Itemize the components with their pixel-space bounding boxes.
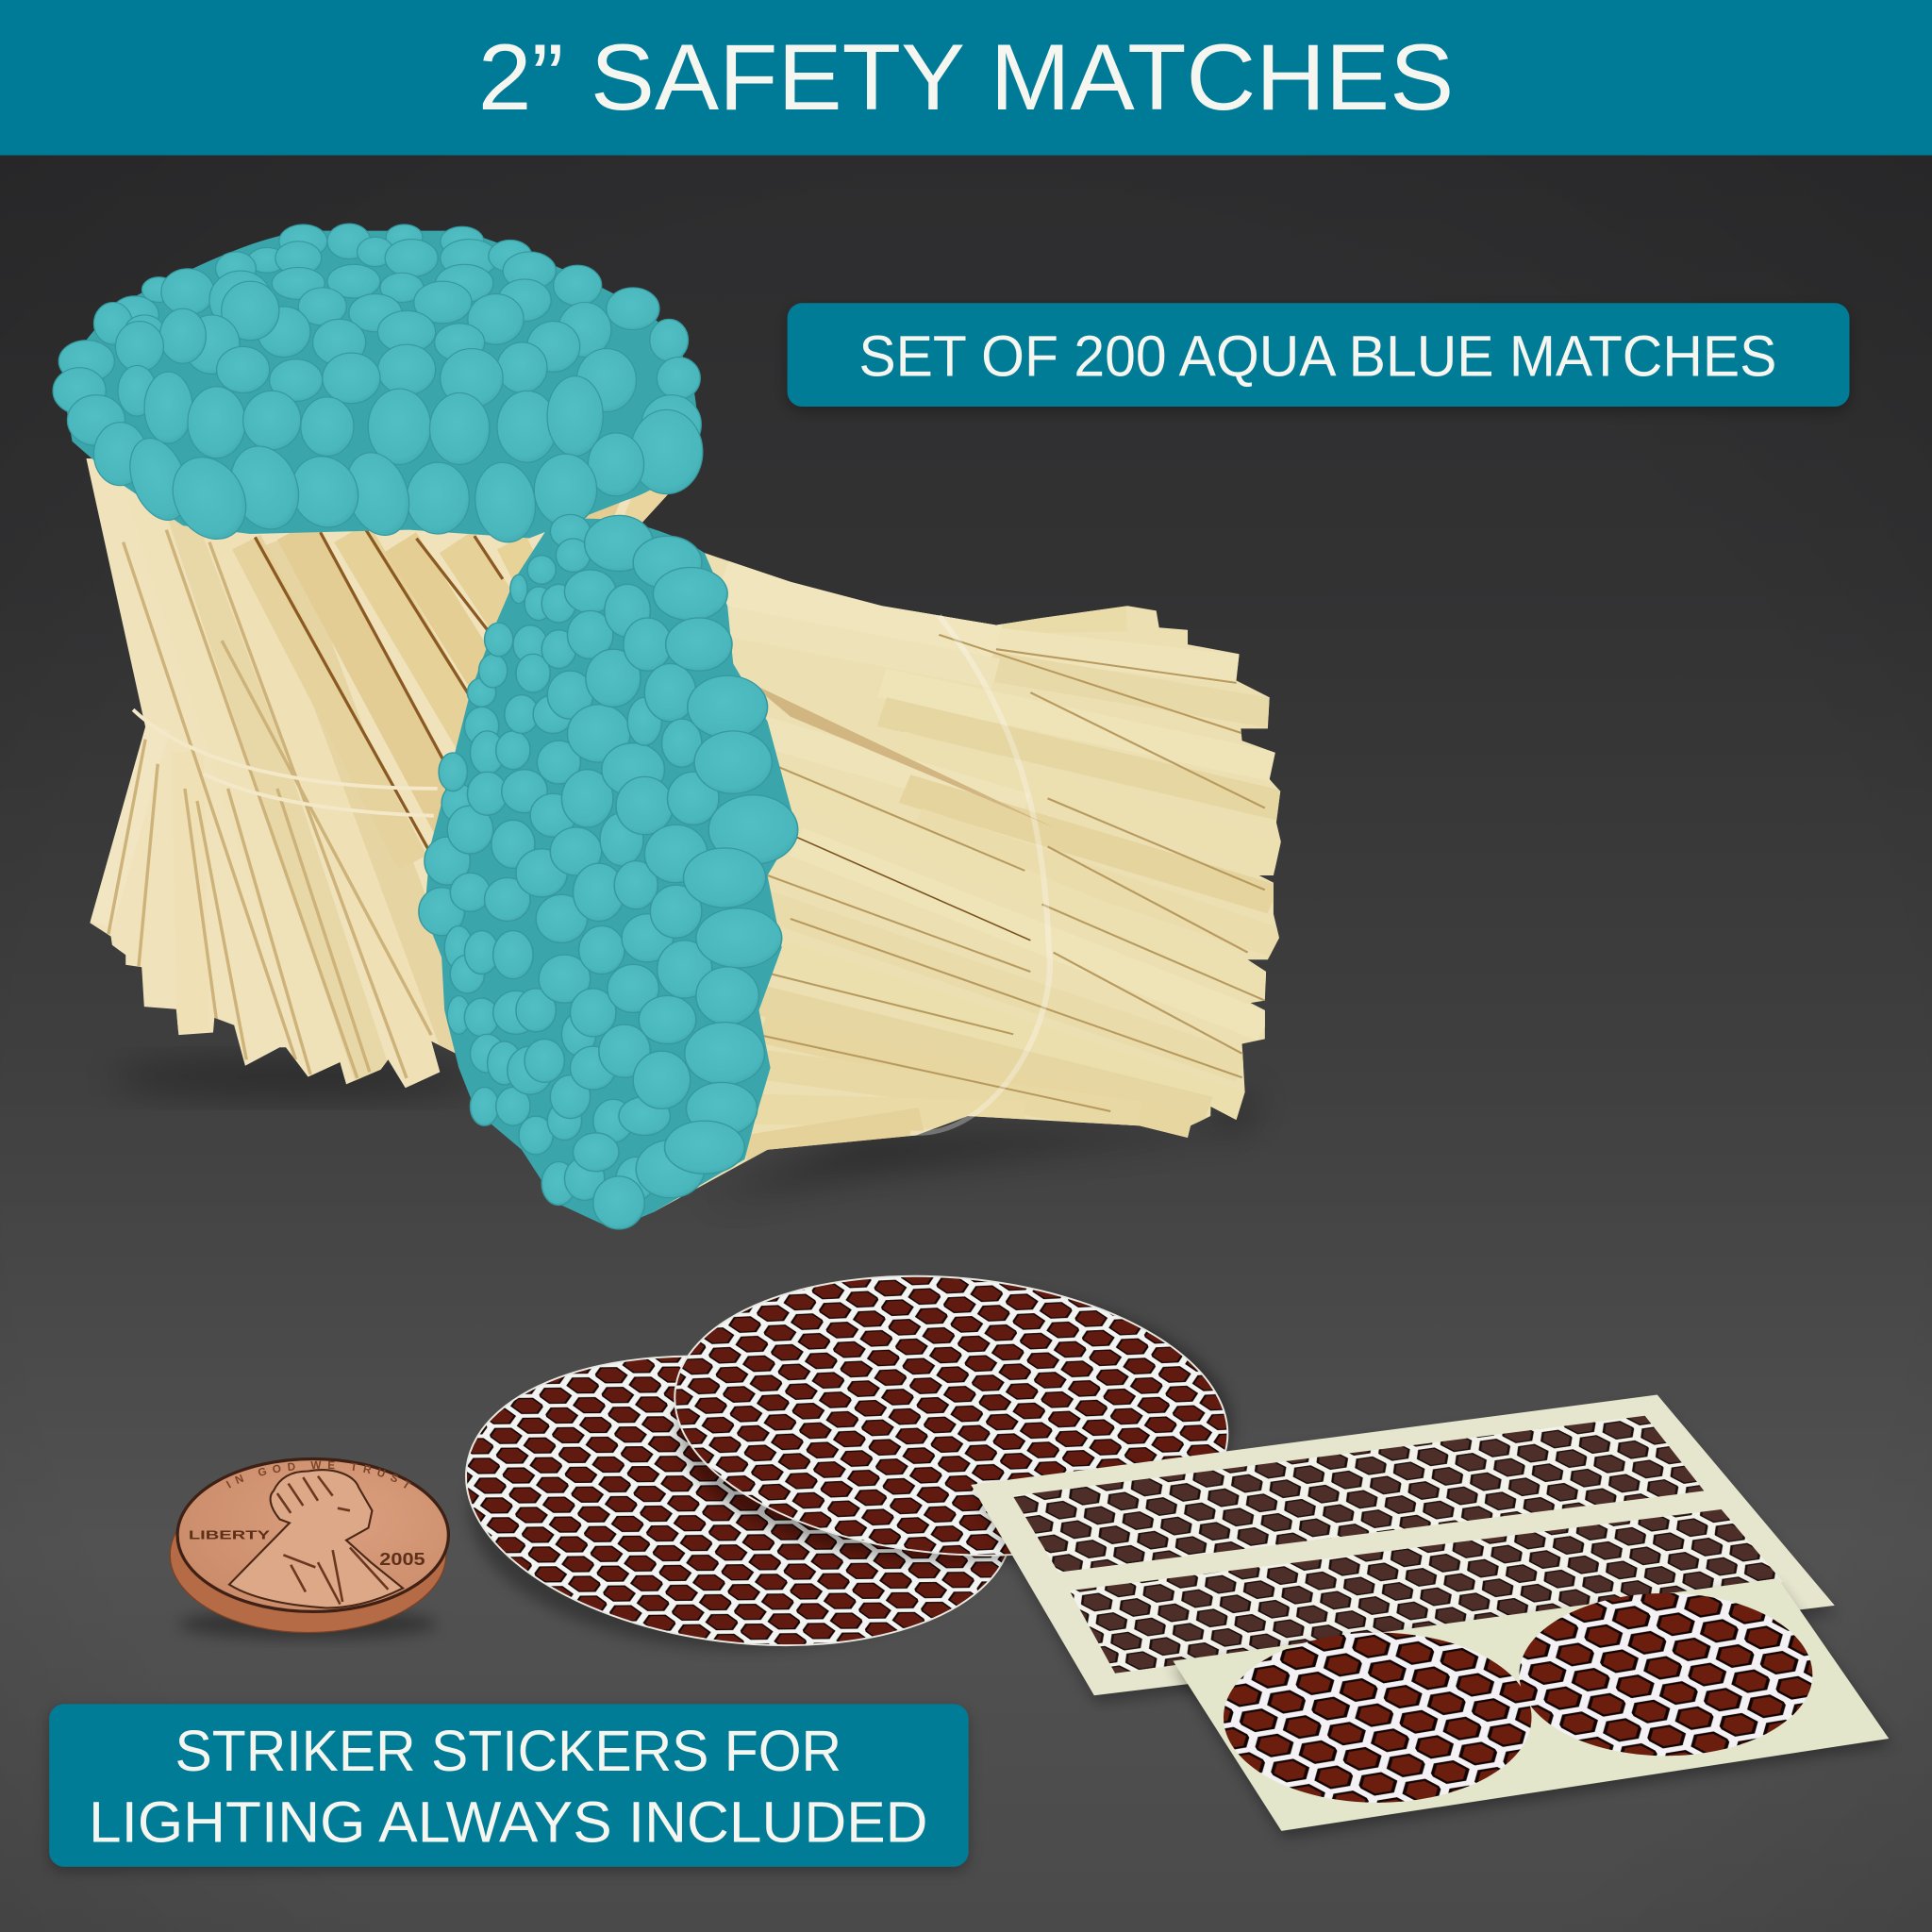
penny date: 2005 xyxy=(379,1549,425,1569)
stick shading xyxy=(108,530,431,1078)
lying stick gaps xyxy=(750,683,1054,827)
callout text: LIGHTING ALWAYS INCLUDED xyxy=(89,1790,928,1856)
penny edge xyxy=(170,1477,446,1633)
lying rubber band xyxy=(910,615,1050,1133)
sheet shadow xyxy=(1173,1585,1891,1837)
striker disc upper xyxy=(663,1254,1240,1577)
strip a xyxy=(1013,1416,1704,1573)
round sheet xyxy=(1173,1578,1889,1831)
upright match bundle xyxy=(53,224,703,1109)
striker strip sticker sheet xyxy=(971,1395,1835,1703)
penny motto: IN GOD WE TRUST xyxy=(226,1460,411,1489)
callout: striker stickers xyxy=(49,1704,969,1867)
callout text: STRIKER STICKERS FOR xyxy=(175,1719,841,1784)
round sticker left xyxy=(1224,1633,1532,1803)
callout: set of 200 xyxy=(788,303,1849,407)
lying match bundle xyxy=(419,514,1293,1229)
penny face xyxy=(177,1458,448,1611)
penny xyxy=(170,1457,450,1643)
sheet shadow xyxy=(974,1405,1835,1703)
lincoln bust xyxy=(229,1470,403,1607)
title: 2” SAFETY MATCHES xyxy=(478,25,1454,130)
bundle shadow xyxy=(702,1084,1257,1201)
strip b xyxy=(1070,1509,1783,1674)
striker discs xyxy=(449,1254,1240,1674)
match heads top xyxy=(53,224,703,548)
lying match heads xyxy=(419,514,798,1229)
rubber band xyxy=(133,709,438,816)
penny liberty text: LIBERTY xyxy=(189,1527,271,1541)
upright sticks xyxy=(87,458,668,1089)
callout text: SET OF 200 AQUA BLUE MATCHES xyxy=(858,324,1776,389)
round sticker sheet xyxy=(1173,1578,1891,1837)
stick gaps xyxy=(255,530,510,850)
disc shadow xyxy=(470,1368,1017,1649)
lincoln hair and coat lines xyxy=(277,1476,388,1605)
header banner xyxy=(0,0,1932,156)
penny shadow xyxy=(178,1609,438,1639)
striker disc lower xyxy=(449,1326,1029,1674)
strip sheet xyxy=(971,1395,1835,1695)
bundle shadow xyxy=(111,1058,480,1098)
lying sticks and heads xyxy=(419,514,1293,1229)
upper disc shadow xyxy=(677,1291,1232,1561)
lying stick bands xyxy=(653,553,1281,1212)
round sticker right xyxy=(1519,1593,1812,1756)
